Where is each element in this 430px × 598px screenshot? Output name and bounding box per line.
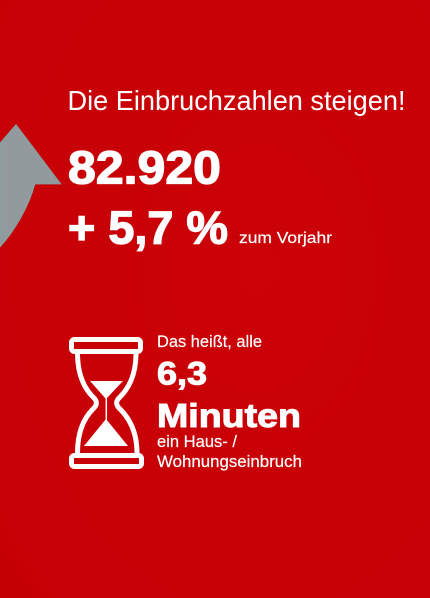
caption: compared to previous year: zum Vorjahr <box>239 230 333 247</box>
text block: every 6.3 minutes a burglary <box>157 332 302 471</box>
icon: hourglass <box>72 340 142 466</box>
caption line 2: Wohnungseinbruch <box>157 452 302 471</box>
statistic: plus 5.7 percent: + 5,7 % <box>68 202 228 254</box>
title: Die Einbruchzahlen steigen! <box>68 85 406 116</box>
statistic: 6,3: 6,3 <box>157 356 207 392</box>
icon: grey rising arrow <box>0 124 61 247</box>
statistic: plus 5.7 percent <box>68 202 333 254</box>
caption line 1: ein Haus- / <box>157 432 237 451</box>
statistic: Minuten: Minuten <box>157 397 301 434</box>
statistic: 82.920 cases: 82.920 <box>68 142 221 194</box>
lead-in text: Das heißt, alle <box>157 332 262 351</box>
